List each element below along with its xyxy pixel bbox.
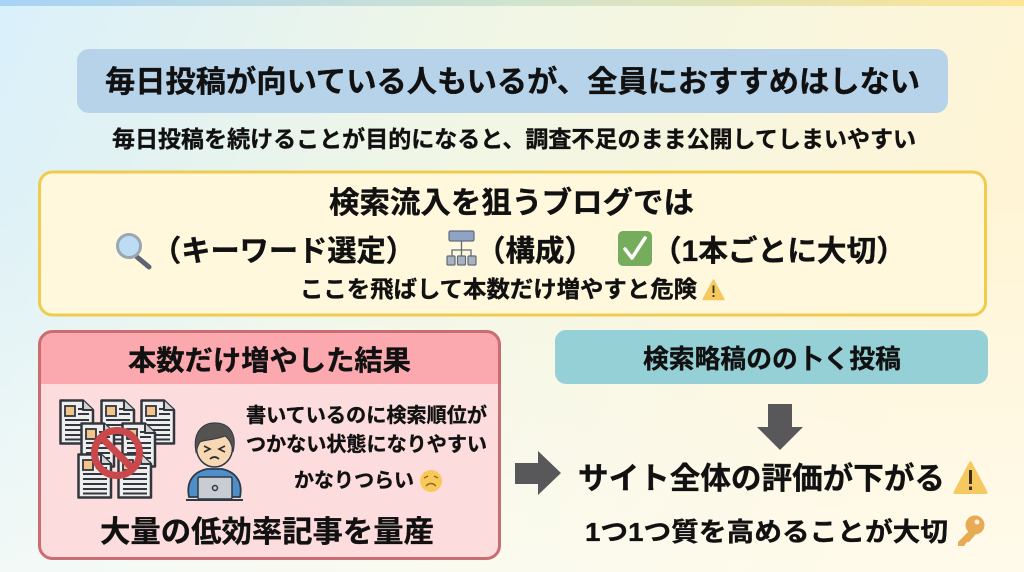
hard to rank text: つかない状態になりやすい	[246, 433, 487, 456]
keyword selection label: （キーワード選定）	[152, 235, 415, 268]
icon: warning	[955, 463, 986, 492]
panel: search traffic blog	[40, 172, 986, 315]
panel: result of only increasing article count	[39, 331, 499, 558]
icon: key	[958, 516, 984, 546]
icon: frustrated person with laptop	[186, 423, 243, 500]
mass production text: 大量の低効率記事を量産	[100, 516, 434, 549]
very painful text: かなりつらい	[294, 469, 414, 492]
icon: check mark	[618, 231, 652, 266]
title banner: 毎日投稿が向いている人もいるが、全員におすすめはしない	[105, 65, 920, 99]
icon: small warning	[703, 280, 724, 300]
icon: hierarchy	[447, 231, 476, 265]
icon: sad face	[420, 470, 442, 492]
quality text: 1つ1つ質を高めることが大切	[585, 517, 948, 547]
hard to rank text: 書いているのに検索順位が	[246, 403, 487, 427]
panel heading: 検索流入を狙うブログでは	[329, 186, 694, 220]
icon: crossed out articles	[60, 400, 174, 498]
arrow: right	[515, 451, 561, 495]
hard to rank text	[246, 403, 487, 456]
subtitle: 毎日投稿を続けることが目的になると、調査不足のまま公開してしまいやすい	[112, 126, 916, 152]
arrow: down	[757, 404, 803, 450]
panel heading: 本数だけ増やした結果	[128, 345, 411, 376]
title banner	[77, 49, 948, 113]
site evaluation text: サイト全体の評価が下がる	[578, 461, 945, 496]
icon: magnifying glass	[118, 234, 149, 267]
header: search strategy post: 検索略稿のの卜く投稿	[643, 344, 901, 374]
one by one label: （1本ごとに大切）	[652, 234, 906, 268]
header: search strategy post	[555, 330, 988, 384]
structure label: （構成）	[476, 235, 594, 268]
warning sentence: ここを飛ばして本数だけ増やすと危険	[300, 276, 697, 302]
